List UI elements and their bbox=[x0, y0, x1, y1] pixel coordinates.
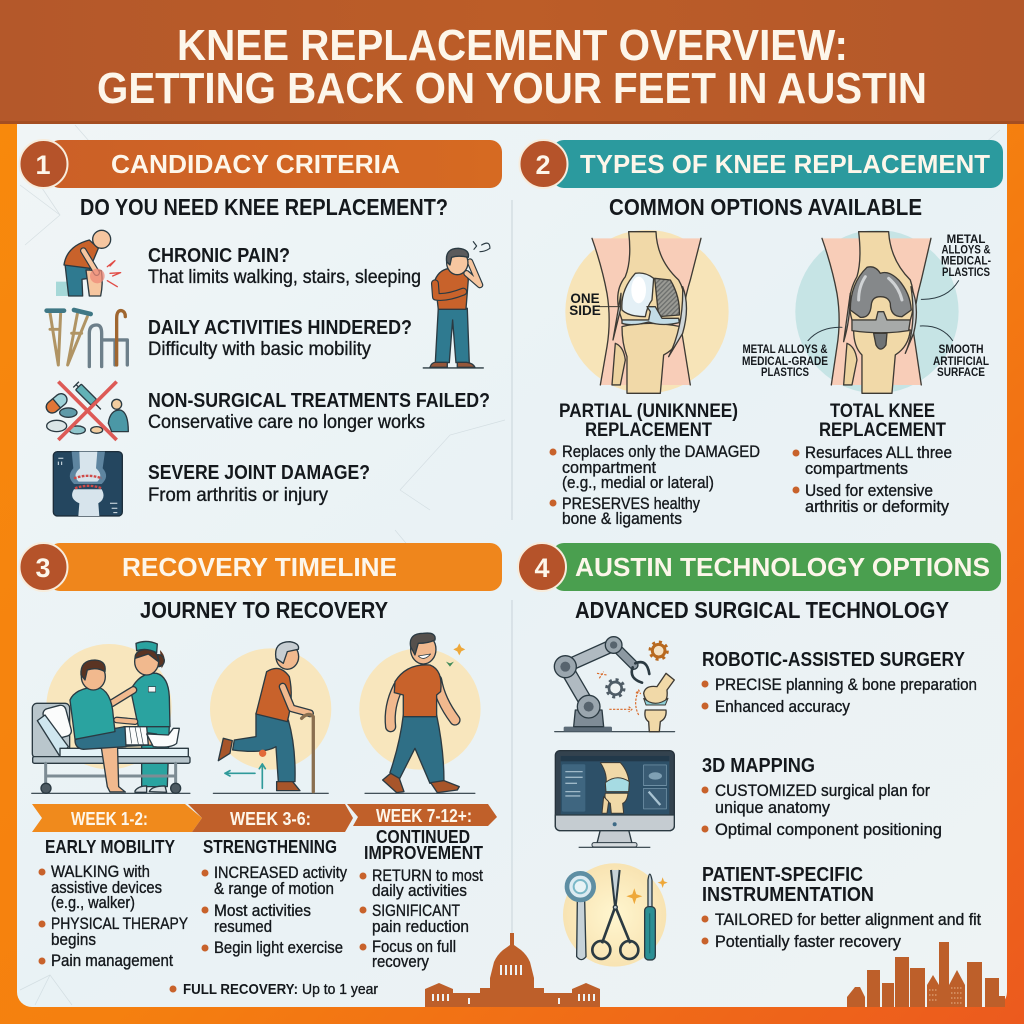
full recovery note: Up to 1 year bbox=[302, 981, 378, 998]
early mobility column: WALKING with bbox=[51, 863, 150, 881]
early mobility column: EARLY MOBILITY bbox=[45, 836, 176, 857]
section 4 subheading: ADVANCED SURGICAL TECHNOLOGY bbox=[575, 597, 949, 623]
icon: crutches and walker bbox=[47, 310, 127, 367]
total replacement heading: REPLACEMENT bbox=[819, 419, 946, 441]
title: GETTING BACK ON YOUR FEET IN AUSTIN bbox=[97, 64, 927, 113]
timeline week 3-6: WEEK 3-6: bbox=[230, 809, 311, 829]
section 2 header bar: TYPES OF KNEE REPLACEMENT bbox=[580, 149, 990, 179]
icon: 3D mapping monitor bbox=[555, 751, 674, 847]
3D mapping text bbox=[702, 754, 942, 839]
3D mapping text: unique anatomy bbox=[715, 798, 830, 817]
partial replacement bullets: (e.g., medial or lateral) bbox=[562, 473, 714, 492]
total replacement bullets: Used for extensive bbox=[805, 481, 933, 500]
strengthening column: Begin light exercise bbox=[214, 939, 343, 957]
continued improvement column bbox=[360, 826, 484, 971]
patient-specific instrumentation text: TAILORED for better alignment and fit bbox=[715, 910, 981, 929]
label: smooth artificial surface: ARTIFICIAL bbox=[933, 356, 989, 368]
label: smooth artificial surface bbox=[933, 344, 989, 379]
strengthening column: STRENGTHENING bbox=[203, 836, 337, 857]
patient-specific instrumentation text bbox=[702, 863, 981, 951]
section 4 header bar: AUSTIN TECHNOLOGY OPTIONS bbox=[575, 552, 990, 582]
timeline week 1-2 bbox=[32, 804, 202, 832]
icon: standing man in pain bbox=[423, 242, 490, 368]
robotic-assisted surgery text: PRECISE planning & bone preparation bbox=[715, 675, 977, 694]
title banner bbox=[0, 0, 1024, 124]
timeline week 1-2: WEEK 1-2: bbox=[71, 809, 148, 829]
label: metal alloys and medical plastics: PLASTICS bbox=[942, 267, 990, 279]
partial replacement bullets: PRESERVES healthy bbox=[562, 494, 700, 513]
label: one side: ONE bbox=[570, 291, 600, 306]
continued improvement column: CONTINUED bbox=[376, 826, 470, 847]
partial replacement bullets bbox=[550, 442, 760, 528]
icon: robotic arm with knee joint bbox=[554, 637, 675, 732]
continued improvement column: RETURN to most bbox=[372, 867, 483, 885]
row: non-surgical treatments bbox=[148, 389, 490, 433]
strengthening column: resumed bbox=[214, 918, 272, 936]
illustration: total knee replacement bbox=[795, 230, 959, 393]
partial replacement heading: PARTIAL (UNIKNNEE) bbox=[559, 400, 738, 422]
full recovery note bbox=[170, 981, 378, 998]
section 4 header bar bbox=[518, 543, 1001, 591]
early mobility column: assistive devices bbox=[51, 879, 162, 897]
early mobility column bbox=[38, 836, 188, 970]
panel: 2 types of knee replacement bbox=[520, 140, 1003, 528]
continued improvement column: daily activities bbox=[372, 882, 467, 900]
Austin skyline silhouette bbox=[847, 942, 1005, 1007]
section 1 subheading: DO YOU NEED KNEE REPLACEMENT? bbox=[80, 194, 448, 220]
row: severe joint damage bbox=[148, 461, 370, 506]
robotic-assisted surgery text: Enhanced accuracy bbox=[715, 697, 850, 716]
robotic-assisted surgery text bbox=[702, 648, 977, 716]
row: non-surgical treatments: Conservative care no longer works bbox=[148, 412, 425, 433]
section 4 header bar: 4 bbox=[534, 553, 550, 583]
partial replacement bullets: Replaces only the DAMAGED bbox=[562, 442, 760, 461]
Austin capitol silhouette bbox=[425, 933, 600, 1007]
section 3 subheading: JOURNEY TO RECOVERY bbox=[140, 597, 388, 623]
partial replacement heading bbox=[559, 400, 738, 441]
continued improvement column: IMPROVEMENT bbox=[364, 842, 484, 863]
strengthening column: INCREASED activity bbox=[214, 864, 348, 882]
label: metal alloys and medical plastics bbox=[941, 234, 991, 279]
timeline week 7-12+: WEEK 7-12+: bbox=[376, 806, 472, 826]
3D mapping text: 3D MAPPING bbox=[702, 754, 815, 777]
row: severe joint damage: From arthritis or injury bbox=[148, 485, 328, 506]
full recovery note: FULL RECOVERY: bbox=[183, 981, 298, 998]
early mobility column: Pain management bbox=[51, 952, 173, 970]
early mobility column: (e.g., walker) bbox=[51, 894, 135, 912]
row: daily activities bbox=[148, 316, 412, 360]
label: metal alloys and medical plastics: METAL bbox=[947, 234, 985, 246]
patient-specific instrumentation text: PATIENT-SPECIFIC bbox=[702, 863, 863, 886]
section 1 header bar: 1 bbox=[35, 150, 51, 180]
timeline week 3-6 bbox=[188, 804, 353, 832]
total replacement heading bbox=[819, 400, 946, 441]
icon: knee x-ray bbox=[53, 452, 122, 516]
partial replacement bullets: compartment bbox=[562, 458, 656, 477]
panel: 4 austin technology options bbox=[518, 543, 1001, 967]
continued improvement column: Focus on full bbox=[372, 938, 456, 956]
continued improvement column: pain reduction bbox=[372, 918, 469, 936]
icon: failed non-surgical treatments bbox=[44, 382, 128, 440]
label: metal alloys and medical-grade plastics: PLASTICS bbox=[761, 367, 809, 379]
label: metal alloys and medical-grade plastics: MEDICAL-GRADE bbox=[742, 356, 828, 368]
section 3 header bar: 3 bbox=[35, 553, 51, 583]
row: severe joint damage: SEVERE JOINT DAMAGE? bbox=[148, 461, 370, 484]
section 2 header bar: 2 bbox=[535, 150, 551, 180]
row: chronic pain: That limits walking, stairs, sleeping bbox=[148, 267, 421, 288]
label: metal alloys and medical plastics: MEDICAL- bbox=[941, 256, 991, 268]
row: daily activities: DAILY ACTIVITIES HINDERED? bbox=[148, 316, 412, 339]
panel: 1 candidacy criteria bbox=[20, 140, 502, 516]
continued improvement column: SIGNIFICANT bbox=[372, 902, 460, 920]
continued improvement column: recovery bbox=[372, 953, 430, 971]
section 2 header bar bbox=[520, 140, 1003, 188]
section 3 header bar: RECOVERY TIMELINE bbox=[122, 552, 397, 582]
partial replacement bullets: bone & ligaments bbox=[562, 509, 682, 528]
illustration: patient and nurse at bedside bbox=[32, 641, 190, 793]
robotic-assisted surgery text: ROBOTIC-ASSISTED SURGERY bbox=[702, 648, 965, 671]
partial replacement heading: REPLACEMENT bbox=[585, 419, 712, 441]
label: smooth artificial surface: SURFACE bbox=[937, 367, 985, 379]
row: non-surgical treatments: NON-SURGICAL TREATMENTS FAILED? bbox=[148, 389, 490, 412]
label: metal alloys and medical plastics: ALLOYS & bbox=[942, 244, 990, 256]
illustration: man walking confidently bbox=[359, 633, 481, 793]
label: one side: SIDE bbox=[569, 303, 601, 318]
section 3 header bar bbox=[20, 543, 502, 591]
row: chronic pain bbox=[148, 244, 421, 288]
strengthening column bbox=[202, 836, 348, 957]
panel: 3 recovery timeline bbox=[20, 543, 502, 998]
row: daily activities: Difficulty with basic mobility bbox=[148, 339, 371, 360]
illustration: older man walking with cane bbox=[210, 642, 331, 793]
patient-specific instrumentation text: INSTRUMENTATION bbox=[702, 883, 874, 906]
label: one side bbox=[569, 291, 601, 318]
total replacement bullets: arthritis or deformity bbox=[805, 497, 949, 516]
title bbox=[97, 21, 927, 113]
3D mapping text: Optimal component positioning bbox=[715, 820, 942, 839]
total replacement bullets: Resurfaces ALL three bbox=[805, 443, 952, 462]
early mobility column: begins bbox=[51, 931, 96, 949]
title: KNEE REPLACEMENT OVERVIEW: bbox=[177, 21, 848, 70]
label: smooth artificial surface: SMOOTH bbox=[938, 344, 984, 356]
illustration: partial knee replacement bbox=[565, 230, 729, 393]
total replacement bullets bbox=[792, 443, 952, 516]
total replacement bullets: compartments bbox=[805, 459, 908, 478]
label: metal alloys and medical-grade plastics: METAL ALLOYS & bbox=[742, 344, 828, 356]
timeline week 7-12+ bbox=[347, 804, 497, 826]
section 1 header bar bbox=[20, 140, 502, 188]
icon: surgical instruments bbox=[563, 863, 668, 967]
icon: person with knee pain bbox=[56, 230, 121, 296]
strengthening column: & range of motion bbox=[214, 880, 334, 898]
strengthening column: Most activities bbox=[214, 902, 311, 920]
section 1 header bar: CANDIDACY CRITERIA bbox=[111, 149, 400, 179]
row: chronic pain: CHRONIC PAIN? bbox=[148, 244, 290, 267]
label: metal alloys and medical-grade plastics bbox=[742, 344, 828, 379]
early mobility column: PHYSICAL THERAPY bbox=[51, 915, 188, 933]
total replacement heading: TOTAL KNEE bbox=[830, 400, 935, 422]
patient-specific instrumentation text: Potentially faster recovery bbox=[715, 932, 901, 951]
3D mapping text: CUSTOMIZED surgical plan for bbox=[715, 781, 930, 800]
section 2 subheading: COMMON OPTIONS AVAILABLE bbox=[609, 194, 922, 220]
